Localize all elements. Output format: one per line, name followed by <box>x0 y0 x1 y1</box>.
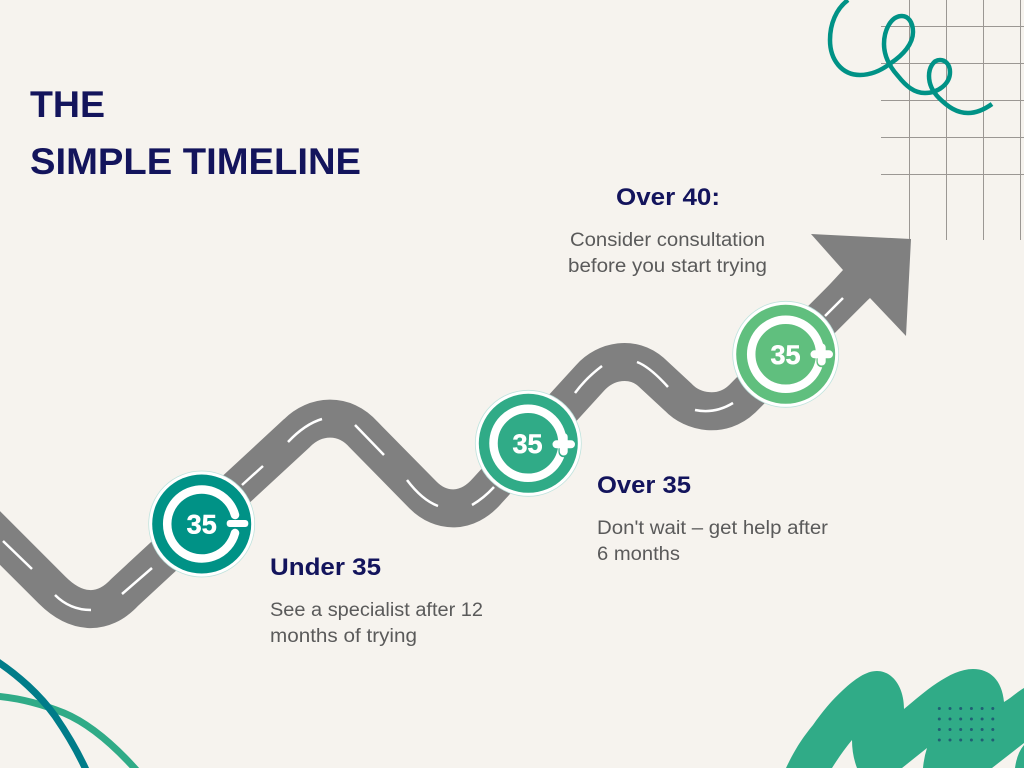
text block: over 35: Over 35 <box>597 472 691 499</box>
milestone badge: over 35 plus <box>733 301 839 407</box>
text block: under 35: See a specialist after 12 <box>270 600 483 621</box>
title: SIMPLE TIMELINE <box>30 141 361 182</box>
text block: over 40 <box>568 184 767 277</box>
road surface <box>0 276 865 609</box>
milestone badge: over 35: 35 <box>512 429 543 459</box>
text block: under 35 <box>270 554 483 647</box>
text block: over 40: before you start trying <box>568 256 767 277</box>
decoration: green brush shape bottom right <box>786 669 1024 768</box>
text block: under 35: Under 35 <box>270 554 381 581</box>
text block: over 35: 6 months <box>597 544 680 565</box>
title <box>30 84 361 182</box>
milestone badge: over 35 plus: 35 <box>770 340 801 370</box>
decoration: curved lines bottom left <box>0 660 138 768</box>
milestone badge: over 35 <box>475 390 581 496</box>
text block: over 35: Don't wait – get help after <box>597 518 829 539</box>
arrow head <box>811 234 911 336</box>
decoration: grid lines top right <box>881 0 1024 240</box>
text block: over 35 <box>597 472 829 565</box>
title: THE <box>30 84 105 125</box>
text block: over 40: Consider consultation <box>570 230 765 251</box>
road arrow timeline <box>0 234 911 610</box>
decoration: dot grid on brush shape <box>938 707 994 742</box>
text block: over 40: Over 40: <box>616 184 720 211</box>
text block: under 35: months of trying <box>270 626 417 647</box>
milestone badge: under 35 <box>149 471 255 577</box>
road lane dashes <box>3 298 843 610</box>
decoration: teal squiggle top right <box>830 0 992 113</box>
milestone badge: under 35: 35 <box>187 510 217 540</box>
